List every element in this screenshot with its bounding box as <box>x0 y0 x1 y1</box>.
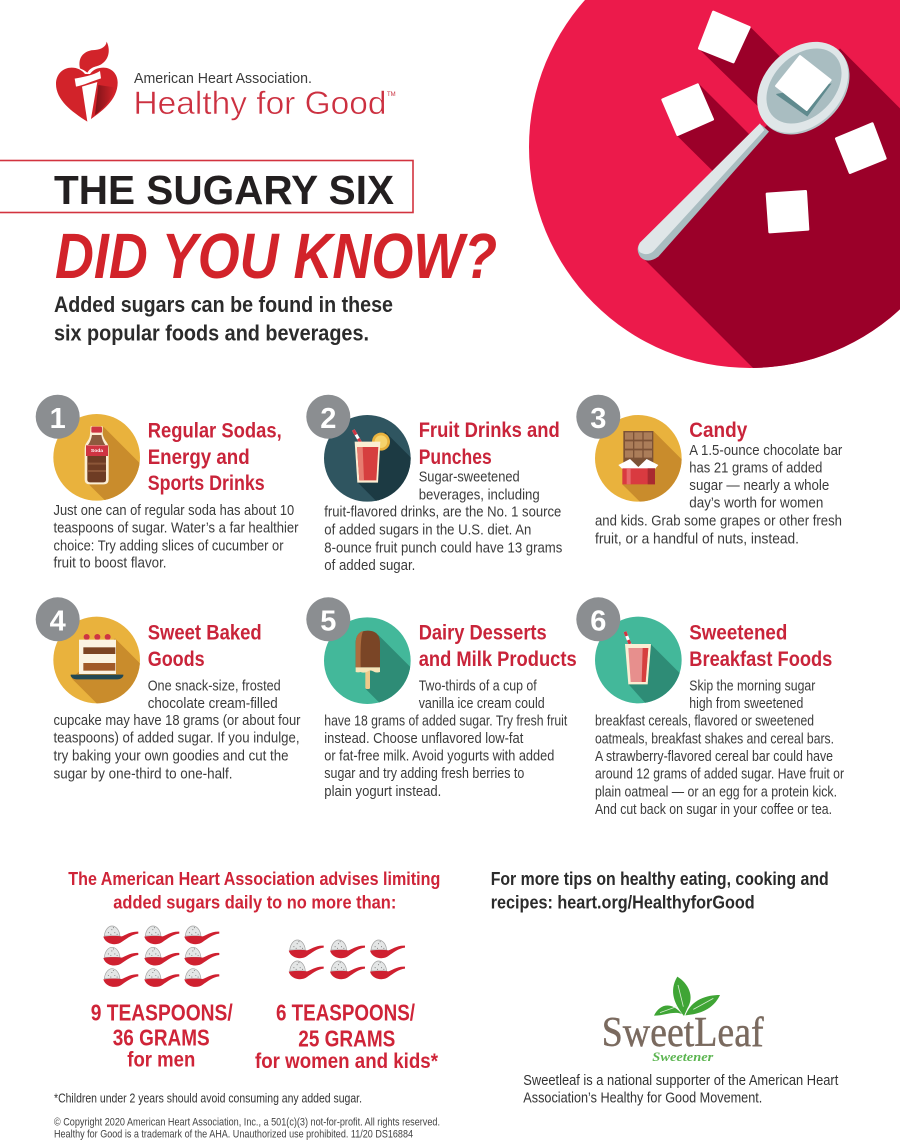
body 5 <box>324 677 568 800</box>
icon: chocolate bar <box>595 415 682 502</box>
icon: soda bottle <box>53 414 140 501</box>
heading 2: Fruit Drinks and <box>419 418 560 442</box>
badge 1 <box>36 395 80 439</box>
body 3: A 1.5-ounce chocolate bar <box>689 442 842 459</box>
more tips text: recipes: heart.org/HealthyforGood <box>491 891 755 912</box>
heading 5: and Milk Products <box>419 647 577 671</box>
intro text: six popular foods and beverages. <box>54 321 369 346</box>
badge 5 <box>306 597 350 641</box>
panel 4: sweet baked goods <box>36 597 301 782</box>
copyright: Healthy for Good is a trademark of the AHA. Unauthorized use prohibited. 11/20 DS16884 <box>54 1129 413 1141</box>
sponsor text: Sweetleaf is a national supporter of the American Heart <box>523 1073 838 1089</box>
limit for men: for men <box>127 1049 195 1072</box>
heading 4: Sweet Baked <box>148 621 262 645</box>
body 3: has 21 grams of added <box>689 460 822 477</box>
intro text: Added sugars can be found in these <box>54 292 393 317</box>
footnote: *Children under 2 years should avoid consuming any added sugar. <box>54 1091 362 1105</box>
sponsor text: Association’s Healthy for Good Movement. <box>523 1091 762 1107</box>
body 6 <box>595 677 844 818</box>
limit for men: 9 TEASPOONS/ <box>91 1000 233 1026</box>
icon: heart and torch <box>56 42 118 122</box>
heading 2 <box>419 418 560 469</box>
body 2 <box>324 469 562 574</box>
heading 4 <box>148 621 262 671</box>
body 1: Just one can of regular soda has about 10 <box>54 502 294 519</box>
limit for women and kids: 6 TEASPOONS/ <box>276 1000 415 1026</box>
body 3: day’s worth for women <box>689 495 823 512</box>
logo: SweetLeaf <box>602 977 764 1064</box>
hero circle <box>529 0 900 368</box>
heading 2: Punches <box>419 445 492 469</box>
limit for women and kids: for women and kids* <box>255 1050 439 1073</box>
trademark: TM <box>387 92 396 98</box>
icon: breakfast shake <box>595 616 682 704</box>
icon: leaves <box>654 977 720 1016</box>
limit for women and kids <box>255 1000 439 1073</box>
panel 6: sweetened breakfast foods <box>576 597 844 818</box>
heading 6: Breakfast Foods <box>689 647 832 671</box>
wordmark: SweetLeaf <box>602 1010 764 1056</box>
logo text: American Heart Association. <box>134 70 312 87</box>
limit for women and kids: 25 GRAMS <box>298 1026 395 1052</box>
more tips text <box>491 868 829 912</box>
body 5: sugar and try adding fresh berries to <box>324 765 524 782</box>
heading 5 <box>419 621 577 671</box>
panel 1: regular sodas <box>36 395 298 572</box>
body 1: choice: Try adding slices of cucumber or <box>54 538 284 555</box>
body 6: high from sweetened <box>689 695 803 712</box>
panel 3: candy <box>576 395 842 547</box>
badge 3 <box>576 395 620 439</box>
spoon <box>638 24 868 261</box>
body 3 <box>595 442 842 547</box>
heading 3: Candy <box>689 418 747 442</box>
badge 4: 4 <box>50 606 66 638</box>
body 6: breakfast cereals, flavored or sweetened <box>595 713 814 730</box>
sugar cube left <box>663 85 713 135</box>
body 2: of added sugar. <box>324 557 415 574</box>
copyright: © Copyright 2020 American Heart Association, Inc., a 501(c)(3) not-for-profit. All rights reserved. <box>54 1117 440 1129</box>
heading 6 <box>689 621 832 671</box>
body 1: fruit to boost flavor. <box>54 555 166 572</box>
icon: ice cream bar <box>324 617 411 704</box>
body 4: cupcake may have 18 grams (or about four <box>54 712 301 729</box>
body 2: fruit-flavored drinks, are the No. 1 source <box>324 504 561 521</box>
body 4 <box>54 677 301 782</box>
heading: did you know: DID YOU KNOW? <box>55 220 497 292</box>
body 2: Sugar-sweetened <box>419 469 520 486</box>
copyright <box>54 1117 440 1141</box>
sugar cube bottom <box>767 191 808 232</box>
recommendation heading: added sugars daily to no more than: <box>113 892 396 913</box>
badge 6 <box>576 597 620 641</box>
body 6: plain oatmeal — or an egg for a protein kick. <box>595 783 837 800</box>
sponsor text <box>523 1073 838 1107</box>
icons: six teaspoons <box>289 940 405 979</box>
body 3: sugar — nearly a whole <box>689 477 829 494</box>
title: the sugary six: THE SUGARY SIX <box>54 167 394 213</box>
heading 1 <box>148 419 282 495</box>
panel 2: fruit drinks and punches <box>306 395 562 574</box>
body 6: And cut back on sugar in your coffee or tea. <box>595 801 832 818</box>
body 2: beverages, including <box>419 486 540 503</box>
recommendation heading: The American Heart Association advises limiting <box>68 868 440 889</box>
body 4: chocolate cream-filled <box>148 695 278 712</box>
body 3: fruit, or a handful of nuts, instead. <box>595 530 799 547</box>
body 5: instead. Choose unflavored low-fat <box>324 730 524 747</box>
body 4: teaspoons) of added sugar. If you indulge, <box>54 730 300 747</box>
badge 2: 2 <box>320 403 336 435</box>
body 6: around 12 grams of added sugar. Have fruit or <box>595 766 844 783</box>
body 6: A strawberry-flavored cereal bar could have <box>595 748 833 765</box>
logo wordmark: Healthy for Good <box>134 85 386 121</box>
body 5: Two-thirds of a cup of <box>419 677 537 694</box>
logo: American Heart Association Healthy for Good <box>56 42 396 122</box>
body 1 <box>54 502 298 572</box>
body 6: oatmeals, breakfast shakes and cereal bars. <box>595 730 834 747</box>
icons: nine teaspoons <box>103 926 219 987</box>
body 5: plain yogurt instead. <box>324 783 441 800</box>
body 5: have 18 grams of added sugar. Try fresh fruit <box>324 712 568 729</box>
body 5: or fat-free milk. Avoid yogurts with added <box>324 748 554 765</box>
title box <box>0 160 413 212</box>
body 1: teaspoons of sugar. Water’s a far healthier <box>54 520 298 537</box>
badge 5: 5 <box>320 606 336 638</box>
tagline: Sweetener <box>652 1049 714 1064</box>
heading 1: Energy and <box>148 445 250 469</box>
intro text <box>54 292 393 346</box>
heading 1: Sports Drinks <box>148 471 265 495</box>
panel 5: dairy desserts <box>306 597 577 800</box>
heading 5: Dairy Desserts <box>419 621 547 645</box>
limit for men <box>91 1000 233 1072</box>
limit for men: 36 GRAMS <box>113 1024 210 1050</box>
badge 2 <box>306 395 350 439</box>
recommendation heading <box>68 868 440 913</box>
long shadows <box>642 27 900 380</box>
sugar cube top <box>699 12 749 62</box>
hero: red circle with spoon and sugar cubes <box>529 0 900 380</box>
heading 1: Regular Sodas, <box>148 419 282 443</box>
sugar cube right <box>836 124 885 173</box>
badge 1: 1 <box>50 403 66 435</box>
body 3: and kids. Grab some grapes or other fresh <box>595 513 842 530</box>
icon: fruit punch glass <box>324 415 411 502</box>
icon: soda bottle: Soda <box>91 448 103 454</box>
badge 3: 3 <box>590 403 606 435</box>
icon: layer cake <box>53 616 140 704</box>
body 2: 8-ounce fruit punch could have 13 grams <box>324 539 562 556</box>
more tips text: For more tips on healthy eating, cooking and <box>491 868 829 889</box>
body 4: sugar by one-third to one-half. <box>54 765 232 782</box>
body 4: One snack-size, frosted <box>148 677 281 694</box>
heading 4: Goods <box>148 647 205 671</box>
body 6: Skip the morning sugar <box>689 677 815 694</box>
body 4: try baking your own goodies and cut the <box>54 748 288 765</box>
body 5: vanilla ice cream could <box>419 695 545 712</box>
heading 6: Sweetened <box>689 621 787 645</box>
badge 6: 6 <box>590 606 606 638</box>
body 2: of added sugars in the U.S. diet. An <box>324 522 531 539</box>
badge 4 <box>36 597 80 641</box>
